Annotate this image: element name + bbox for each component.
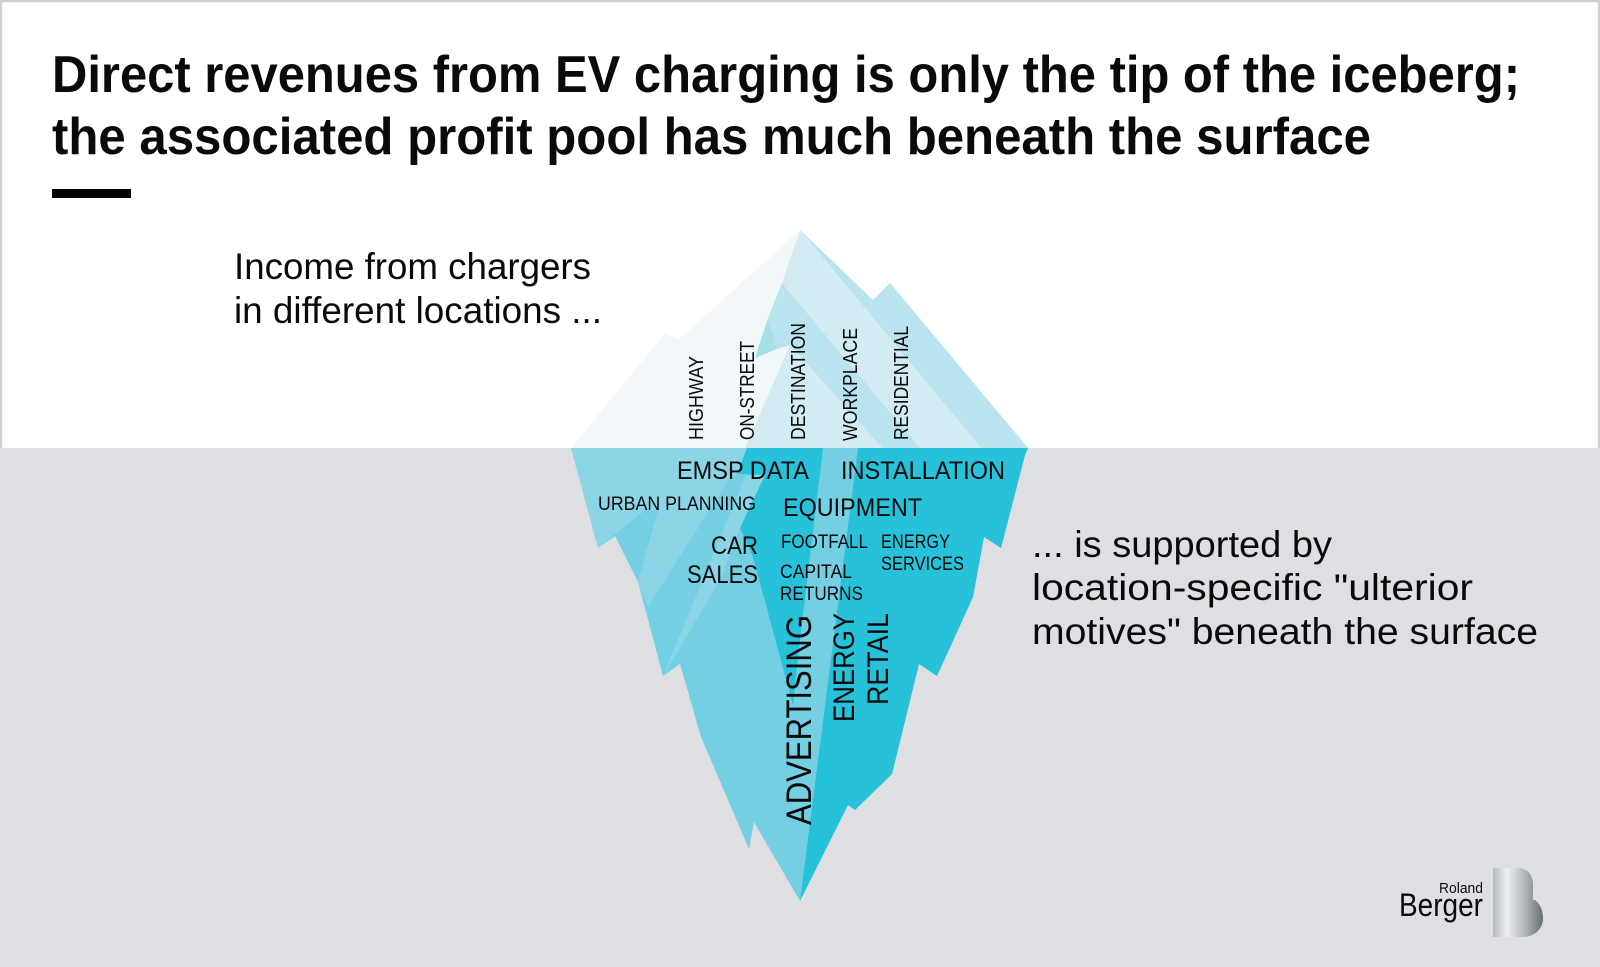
labels: charger locations: HIGHWAY [686, 356, 708, 440]
title: the associated profit pool has much beneath the surface [52, 108, 1371, 166]
text: income from chargers [234, 246, 602, 331]
frame border [1, 1, 1599, 448]
labels: ulterior motives: ENERGY [828, 613, 861, 722]
labels: charger locations: DESTINATION [788, 323, 810, 440]
text: supported by ulterior motives: location-specific "ulterior [1032, 567, 1473, 608]
labels: ulterior motives: SALES [687, 561, 758, 589]
labels: ulterior motives: CAPITAL [780, 561, 852, 583]
title accent bar [52, 189, 131, 198]
labels: charger locations: RESIDENTIAL [891, 326, 913, 440]
text: income from chargers: Income from chargers [234, 246, 591, 287]
labels: ulterior motives: INSTALLATION [841, 457, 1005, 485]
labels: ulterior motives: URBAN PLANNING [598, 493, 756, 515]
labels: ulterior motives: FOOTFALL [781, 531, 868, 553]
text: supported by ulterior motives: motives" beneath the surface [1032, 611, 1538, 652]
logo: Roland Berger: Roland [1439, 880, 1483, 897]
labels: charger locations [686, 323, 913, 441]
labels: ulterior motives: CAR [711, 532, 758, 560]
text: supported by ulterior motives: ... is supported by [1032, 524, 1333, 565]
labels: ulterior motives: RETAIL [862, 613, 895, 705]
text: income from chargers: in different locations ... [234, 290, 602, 331]
iceberg [571, 230, 1028, 901]
title [52, 46, 1520, 166]
labels: ulterior motives [598, 457, 1005, 825]
iceberg below water [571, 448, 1028, 901]
labels: ulterior motives: ENERGY [881, 531, 950, 553]
iceberg above water [571, 230, 1028, 448]
labels: ulterior motives: SERVICES [881, 553, 964, 575]
labels: ulterior motives: EQUIPMENT [783, 494, 922, 522]
title: Direct revenues from EV charging is only the tip of the iceberg; [52, 46, 1520, 104]
water background [0, 448, 1600, 967]
labels: ulterior motives: ADVERTISING [780, 615, 819, 825]
labels: charger locations: ON-STREET [737, 341, 759, 440]
labels: ulterior motives: RETURNS [780, 583, 863, 605]
text: supported by ulterior motives [1032, 524, 1538, 652]
labels: charger locations: WORKPLACE [840, 328, 862, 441]
logo: Roland Berger: Berger [1399, 887, 1483, 923]
labels: ulterior motives: EMSP DATA [677, 457, 809, 485]
logo: Roland Berger [1399, 868, 1543, 937]
